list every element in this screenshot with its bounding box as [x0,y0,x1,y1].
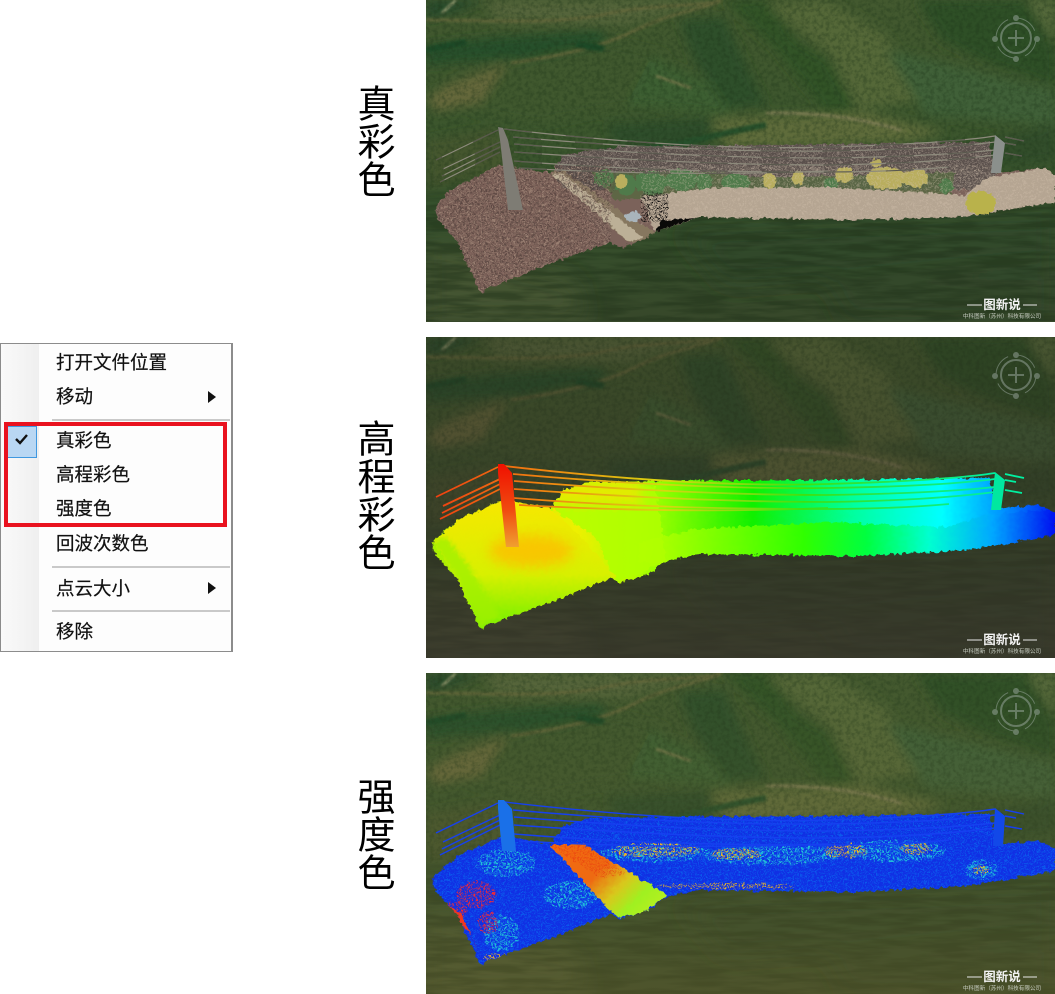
menu item: intensity colour: 强度色 [56,498,112,519]
power lines [436,802,1024,855]
label: true colour: 真彩色 [351,84,393,198]
left pylon [498,800,516,851]
watermark company name: 中科图新（苏州）科技有限公司 [963,312,1041,320]
checked state box [7,426,37,458]
terrain background [426,0,1055,321]
point cloud: true colour [431,140,1055,295]
label: intensity colour: 强度色 [351,777,393,891]
left pylon [498,127,523,210]
submenu arrow: move [208,391,216,403]
menu item: point size: 点云大小 [56,578,130,599]
compass control [992,15,1040,62]
watermark ornament [967,304,1037,306]
panel: intensity colour point cloud [426,673,1055,994]
watermark ornament [967,976,1037,978]
menu item: remove: 移除 [56,621,93,642]
intensity panel tint [426,673,1055,994]
check mark icon [15,434,28,445]
watermark company name: 中科图新（苏州）科技有限公司 [963,647,1041,655]
watermark ornament [967,639,1037,641]
red highlight box [4,422,227,527]
right pylon [991,472,1005,510]
panel: elevation colour point cloud [426,337,1055,658]
power lines [436,129,1024,182]
submenu arrow: point size [208,582,216,594]
menu item: elevation colour: 高程彩色 [56,464,130,485]
point cloud: intensity colours [432,813,1055,966]
terrain background [426,673,1055,994]
panel: true colour point cloud [426,0,1055,322]
menu item: true colour: 真彩色 [56,430,112,451]
elevation panel tint [426,337,1055,658]
compass control [992,352,1040,399]
terrain background [426,337,1055,658]
watermark logo: 图新说 [983,632,1021,647]
right pylon [991,135,1005,173]
menu item: move: 移动 [56,386,93,407]
menu item: open file location: 打开文件位置 [56,352,167,373]
watermark logo: 图新说 [983,297,1021,312]
power line dark segments [436,129,1024,182]
right pylon [993,808,1005,846]
menu item: return count colour: 回波次数色 [56,533,149,554]
compass control [992,688,1040,735]
left pylon [498,464,519,547]
point cloud: elevation colours [432,477,1055,630]
power lines [436,466,1024,519]
watermark company name: 中科图新（苏州）科技有限公司 [963,984,1041,992]
context menu panel [0,343,233,652]
menu icon gutter [1,344,39,651]
watermark logo: 图新说 [983,969,1021,984]
label: elevation colour: 高程彩色 [351,419,393,571]
